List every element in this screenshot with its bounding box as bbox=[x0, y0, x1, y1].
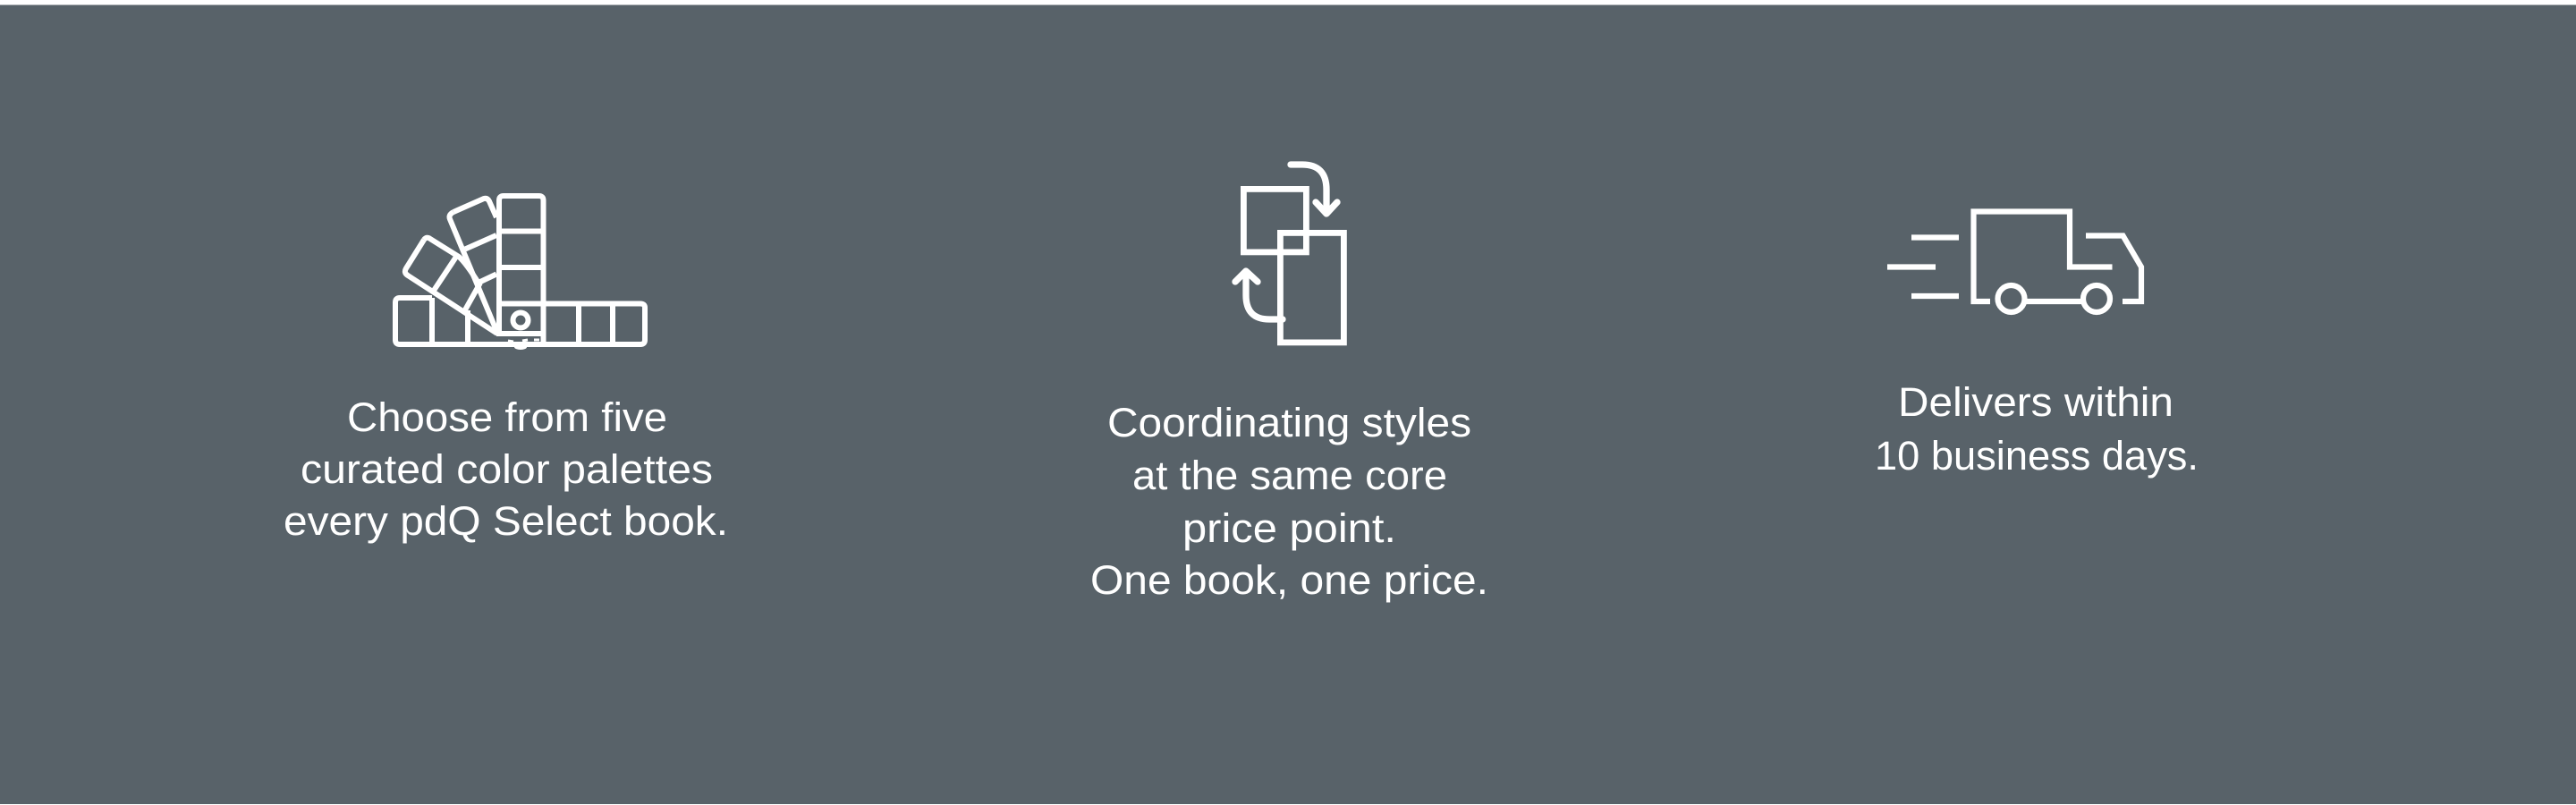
text: delivery caption: Delivers within bbox=[1898, 379, 2174, 425]
text: delivery caption: 10 business days. bbox=[1875, 433, 2199, 479]
text: styles caption: price point. bbox=[1182, 505, 1396, 551]
text: styles caption: Coordinating styles bbox=[1107, 400, 1471, 445]
text: palettes caption: curated color palettes bbox=[301, 446, 713, 492]
icon: fan deck of swatches bbox=[395, 196, 645, 350]
text: delivery caption bbox=[1875, 379, 2199, 479]
text: palettes caption: Choose from five bbox=[347, 394, 667, 440]
text: styles caption: at the same core bbox=[1132, 453, 1447, 498]
panel: color palettes bbox=[284, 196, 728, 544]
icon: delivery truck bbox=[1887, 211, 2141, 312]
text: styles caption bbox=[1090, 400, 1488, 603]
text: palettes caption bbox=[284, 394, 728, 544]
text: palettes caption: every pdQ Select book. bbox=[284, 498, 728, 544]
text: styles caption: One book, one price. bbox=[1090, 557, 1488, 603]
panel: coordinating styles bbox=[1090, 165, 1488, 603]
panel: delivery bbox=[1875, 211, 2199, 479]
icon: swap book formats bbox=[1235, 165, 1343, 343]
